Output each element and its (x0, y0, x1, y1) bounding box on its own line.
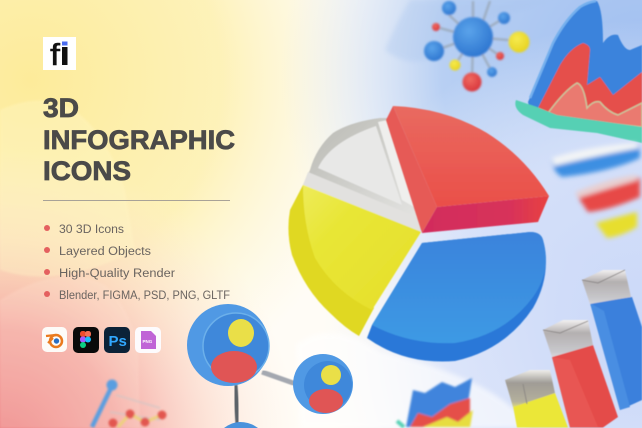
icon: connected user circles (187, 304, 353, 428)
software icons (42, 327, 161, 353)
icon: figma (73, 327, 99, 353)
slice: red (386, 106, 549, 233)
logo: fi badge (43, 37, 76, 72)
yellow bar (505, 370, 568, 428)
blue bar (582, 270, 642, 410)
title (43, 93, 235, 186)
title: ICONS (43, 156, 131, 186)
lower node (224, 422, 258, 428)
icon: network node chart, bottom left (92, 380, 166, 428)
title: INFOGRAPHIC (43, 125, 235, 155)
slice: blue (367, 232, 546, 362)
feature list: Layered Objects (59, 246, 151, 258)
icon: blurred funnel (552, 143, 640, 238)
slice: yellow (288, 185, 421, 336)
feature list (44, 224, 230, 302)
title divider (43, 200, 230, 201)
logo: fi badge: f (50, 37, 60, 72)
pie chart (288, 106, 549, 362)
icon: 3D bar chart (505, 270, 642, 428)
red bar (543, 320, 618, 428)
icon: area chart on teal base (515, 1, 642, 143)
feature list: Blender, FIGMA, PSD, PNG, GLTF (59, 290, 230, 302)
icon: png file: PNG (142, 339, 153, 344)
icon: photoshop: Ps (108, 333, 127, 350)
large user badge (187, 304, 269, 386)
feature list: 30 3D Icons (59, 224, 124, 236)
icon: small blurred area chart (397, 378, 473, 427)
small user badge (293, 354, 353, 414)
title: 3D (43, 93, 79, 123)
icon: blender (42, 327, 67, 352)
icon: molecule network (424, 1, 530, 92)
feature list: High-Quality Render (59, 268, 175, 280)
slice: white glass (303, 118, 426, 232)
